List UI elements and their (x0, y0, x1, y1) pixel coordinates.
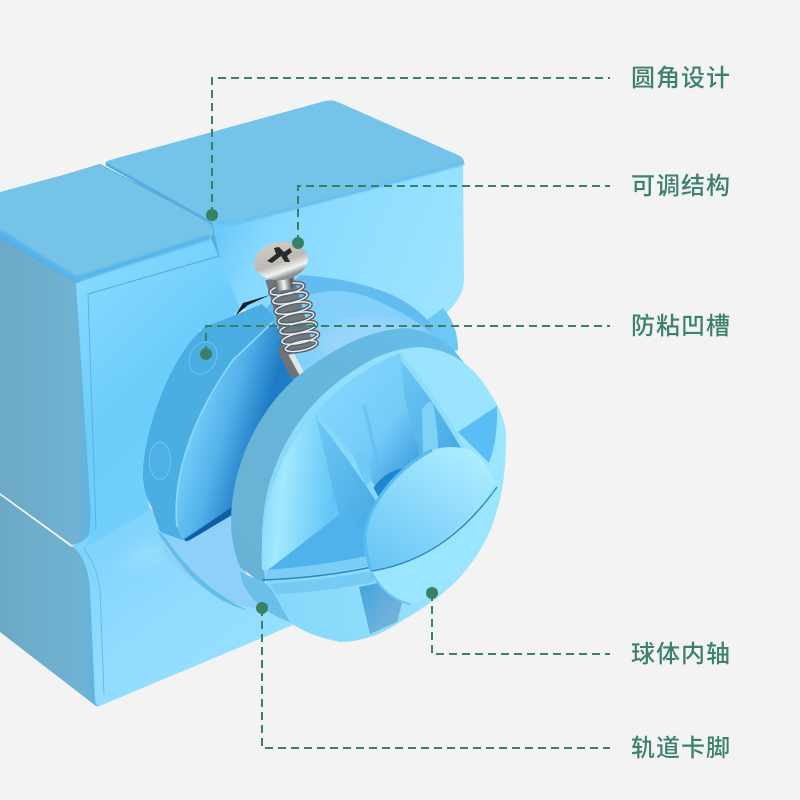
label: 轨道卡脚: 轨道卡脚 (631, 735, 731, 762)
dashed line: rounded corner design (212, 78, 610, 215)
inner ball (231, 328, 506, 642)
label: 球体内轴: 球体内轴 (631, 641, 731, 668)
vane A (315, 413, 380, 531)
dark slot (184, 507, 232, 544)
marker dots (200, 209, 438, 614)
icon: screw head (252, 238, 310, 284)
top arc (262, 275, 432, 380)
cap (364, 447, 495, 570)
dashed line: adjustable structure (298, 186, 610, 243)
groove mark (184, 337, 222, 379)
upper-right region (400, 350, 496, 447)
lower groove mark (150, 442, 170, 480)
slot behind the ball (182, 304, 310, 540)
label: 圆角设计: 圆角设计 (631, 65, 731, 92)
right disc light area (292, 291, 437, 400)
dashed line: anti-stick groove (206, 326, 610, 354)
screw and spring (252, 238, 319, 378)
ball rim (231, 328, 470, 585)
dashed line: ball inner axis (432, 593, 610, 654)
lower vane (359, 578, 402, 634)
ball face (262, 347, 506, 642)
small fin (422, 402, 438, 456)
window (458, 406, 497, 463)
inner band gradient (176, 322, 300, 540)
upper right cube (105, 100, 464, 345)
track foot tab (240, 572, 290, 622)
gap shadow (235, 295, 270, 316)
upper left cube (0, 164, 240, 547)
track foot base (156, 515, 262, 610)
track strip (270, 571, 374, 594)
hub (372, 468, 405, 505)
label: 防粘凹槽: 防粘凹槽 (631, 313, 731, 340)
outer band (143, 304, 275, 540)
lower left cube (0, 495, 300, 706)
upper-left quadrant (262, 412, 339, 570)
ledge (268, 515, 367, 570)
label: 可调结构: 可调结构 (631, 173, 731, 200)
right bump (420, 308, 458, 365)
back disc (143, 275, 458, 544)
back wall between vanes (316, 353, 420, 495)
vane B (400, 353, 464, 456)
dashed line: track foot (262, 608, 610, 748)
small fin A (353, 450, 372, 486)
